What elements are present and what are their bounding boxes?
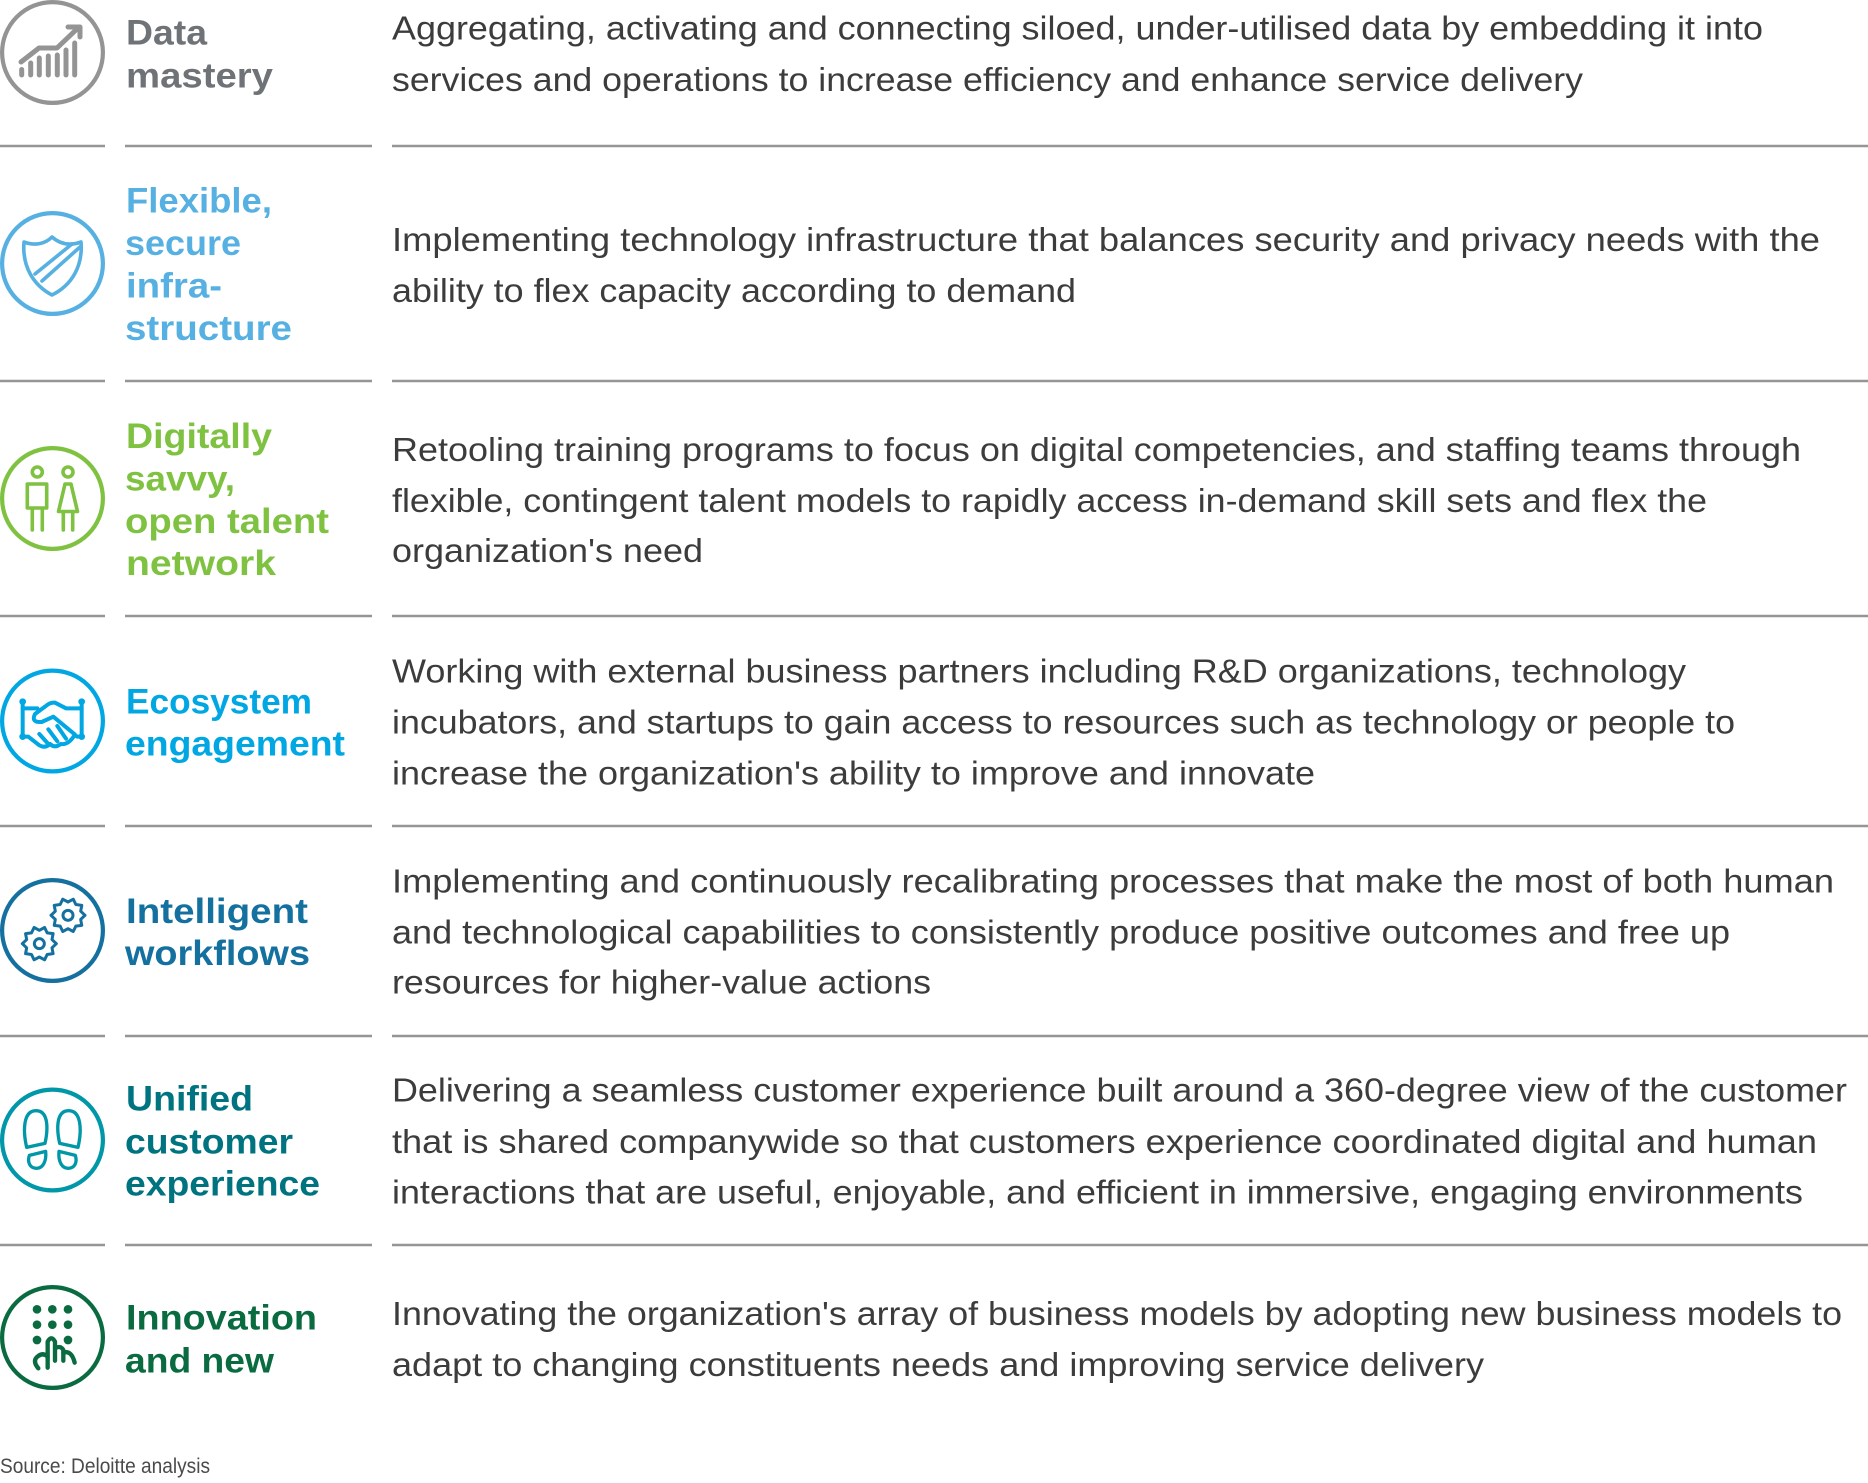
row: data mastery <box>2 2 1763 103</box>
icon: shield <box>2 213 103 314</box>
heading: Innovation and new <box>125 1299 317 1380</box>
description: digitally savvy open talent network <box>392 432 1801 570</box>
description: innovation and new: Innovating the organization's array of business models by adopting new business models to <box>392 1296 1842 1333</box>
heading: Digitally savvy, open talent network: network <box>126 544 277 583</box>
heading: Unified customer experience: Unified <box>126 1080 253 1119</box>
heading: Intelligent workflows: Intelligent <box>126 892 308 931</box>
row: unified customer experience <box>2 1073 1847 1212</box>
icon: rising bar chart with arrow <box>2 2 103 103</box>
heading: Flexible, secure infra-structure: secure <box>125 224 241 263</box>
row: innovation and new <box>2 1287 1842 1388</box>
description: digitally savvy open talent network: Retooling training programs to focus on digital competencies, and staffing teams through <box>392 432 1801 469</box>
heading: Digitally savvy, open talent network: savvy, <box>125 460 235 498</box>
heading: Flexible, secure infra-structure: infra- <box>126 267 222 306</box>
description: unified customer experience <box>392 1073 1847 1212</box>
source note: Source: Deloitte analysis <box>0 1455 210 1478</box>
heading: Digitally savvy, open talent network: Digitally <box>126 417 273 456</box>
heading: Intelligent workflows: workflows <box>124 934 310 973</box>
description: intelligent workflows <box>392 864 1834 1002</box>
description: ecosystem engagement <box>392 654 1735 792</box>
row: intelligent workflows <box>2 864 1834 1002</box>
icon: footprints <box>2 1090 103 1190</box>
description: ecosystem engagement: Working with external business partners including R&D organizations, technology <box>392 654 1686 691</box>
heading: Ecosystem engagement <box>125 682 345 763</box>
description: flexible secure infrastructure: ability to flex capacity according to demand <box>392 273 1076 310</box>
heading: Data mastery <box>126 13 274 95</box>
description: innovation and new <box>392 1296 1842 1384</box>
heading: Unified customer experience: customer <box>125 1122 293 1161</box>
description: intelligent workflows: resources for higher-value actions <box>392 965 931 1002</box>
description: data mastery: Aggregating, activating and connecting siloed, under-utilised data by embedding it into <box>392 11 1763 48</box>
icon: handshake <box>2 671 103 771</box>
description: data mastery <box>392 11 1763 99</box>
heading: Intelligent workflows <box>124 892 310 973</box>
heading: Data mastery: mastery <box>126 56 274 95</box>
description: unified customer experience: interactions that are useful, enjoyable, and efficient in immersive, engaging environments <box>392 1175 1803 1212</box>
description: digitally savvy open talent network: organization's need <box>392 533 703 570</box>
heading: Unified customer experience <box>125 1080 320 1204</box>
description: data mastery: services and operations to increase efficiency and enhance service delivery <box>392 62 1583 99</box>
heading: Innovation and new: Innovation <box>126 1299 317 1338</box>
heading: Data mastery: Data <box>126 13 208 52</box>
icon: two gears <box>2 880 103 981</box>
heading: Flexible, secure infra-structure: Flexible, <box>126 181 272 220</box>
description: unified customer experience: Delivering a seamless customer experience built around a 360-degree view of the customer <box>392 1073 1847 1110</box>
description: innovation and new: adapt to changing constituents needs and improving service delivery <box>392 1347 1484 1384</box>
heading: Unified customer experience: experience <box>125 1165 320 1204</box>
heading: Flexible, secure infra-structure <box>125 181 292 348</box>
row: flexible secure infrastructure <box>2 181 1820 348</box>
heading: Digitally savvy, open talent network <box>125 417 329 583</box>
heading: Ecosystem engagement: Ecosystem <box>126 682 312 721</box>
description: intelligent workflows: Implementing and continuously recalibrating processes that make the most of both human <box>392 864 1834 901</box>
icon: finger on keypad <box>2 1287 103 1388</box>
description: digitally savvy open talent network: flexible, contingent talent models to rapidly access in-demand skill sets and flex the <box>392 483 1707 520</box>
description: flexible secure infrastructure: Implementing technology infrastructure that balances security and privacy needs with the <box>392 222 1820 259</box>
heading: Digitally savvy, open talent network: open talent <box>125 502 329 541</box>
row: digitally savvy open talent network <box>2 417 1801 583</box>
description: ecosystem engagement: increase the organization's ability to improve and innovate <box>392 755 1315 792</box>
description: intelligent workflows: and technological capabilities to consistently produce positive outcomes and free up <box>392 914 1730 951</box>
description: unified customer experience: that is shared companywide so that customers experience coordinated digital and human <box>392 1124 1817 1161</box>
heading: Innovation and new: and new <box>125 1341 275 1380</box>
description: flexible secure infrastructure <box>392 222 1820 310</box>
heading: Flexible, secure infra-structure: structure <box>125 309 292 348</box>
row: ecosystem engagement <box>2 654 1735 792</box>
heading: Ecosystem engagement: engagement <box>125 724 345 763</box>
description: ecosystem engagement: incubators, and startups to gain access to resources such as technology or people to <box>392 705 1735 742</box>
icon: two people <box>2 448 103 549</box>
